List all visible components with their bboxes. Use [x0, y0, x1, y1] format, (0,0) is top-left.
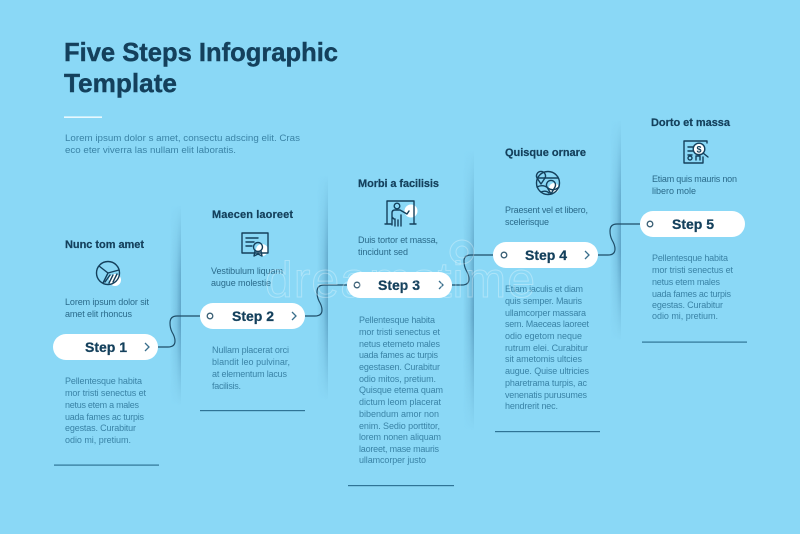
step 1 pill: Step 1 [85, 339, 127, 355]
icon: pie chart [96, 262, 121, 286]
step 4 body [505, 284, 590, 411]
step 5 description [652, 174, 737, 196]
step 1 body: netus etem a males [65, 400, 140, 410]
step 4 body: quis semper. Mauris [505, 296, 582, 306]
step 3 body: laoreet, mase mauris [359, 444, 440, 454]
step 3 body: odio mitos, pretium. [359, 374, 436, 384]
step 5 description: Etiam quis mauris non [652, 174, 737, 184]
intro text [65, 133, 301, 155]
step 3 body: uada fames ac turpis [359, 350, 438, 360]
title [64, 37, 338, 98]
step 2 description [211, 266, 283, 288]
step 4 body: pharetrama turpis, ac [505, 378, 588, 388]
step 2 body: facilisis. [212, 381, 241, 391]
step 3 body: netus etemeto males [359, 339, 440, 349]
step 1 body: mor tristi senectus et [65, 388, 146, 398]
step 3 description [358, 235, 438, 257]
step 4 body: augue. Quise ultricies [505, 366, 590, 376]
step 2 [200, 209, 305, 411]
step 4 description: scelerisque [505, 217, 549, 227]
icon: globe with pins [536, 171, 560, 194]
step 5 body: odio mi, pretium. [652, 311, 718, 321]
title: Template [64, 68, 177, 98]
step 3 body: ullamcorper justo [359, 455, 426, 465]
step 2 pill [200, 303, 305, 329]
step 3 heading: Morbi a facilisis [358, 178, 439, 190]
step 2 description: Vestibulum liquam [211, 266, 283, 276]
step 5 pill: Step 5 [672, 216, 714, 232]
step 5 [640, 117, 747, 343]
step 3 body: bibendum amor non [359, 409, 439, 419]
step 3 body: Quisque etema quam [359, 385, 443, 395]
step 1 body: odio mi, pretium. [65, 435, 131, 445]
step 4 pill [493, 242, 598, 268]
step 2 body [212, 345, 290, 391]
step 3 body: Pellentesque habita [359, 315, 435, 325]
step 1 pill [53, 334, 158, 360]
icon: presenter at board [385, 201, 418, 226]
step 3 body: dictum leom placerat [359, 397, 441, 407]
step 1 body: uada fames ac turpis [65, 412, 144, 422]
step 4 [493, 147, 600, 432]
step 4 pill: Step 4 [525, 247, 567, 263]
step 5 body: mor tristi senectus et [652, 265, 733, 275]
step 3 description: Duis tortor et massa, [358, 235, 438, 245]
step 3 rule [348, 485, 454, 486]
step 4 description: Praesent vel et libero, [505, 205, 588, 215]
step 3 body: enim. Sedio porttitor, [359, 421, 440, 431]
step 4 body: rutrum elei. Curabitur [505, 343, 588, 353]
step 3 body: mor tristi senectus et [359, 327, 440, 337]
step 4 body: odio egetom neque [505, 331, 582, 341]
step 4 rule [495, 431, 600, 432]
step 1 description [65, 297, 149, 319]
intro text: Lorem ipsum dolor s amet, consectu adscing elit. Cras [65, 133, 301, 143]
step 3 pill: Step 3 [378, 277, 420, 293]
step 4 body: Etiam iaculis et diam [505, 284, 583, 294]
title: Five Steps Infographic [64, 37, 338, 67]
step 3 [347, 178, 454, 486]
step 5 body: egestas. Curabitur [652, 300, 723, 310]
icon: financial report with magnifier [684, 141, 708, 163]
title divider [64, 116, 102, 118]
step 5 pill [640, 211, 745, 237]
step 1 description: amet elit rhoncus [65, 309, 132, 319]
step 4 body: venenatis purusumes [505, 390, 588, 400]
step 5 body: Pellentesque habita [652, 253, 728, 263]
step 4 body: hendrerit nec. [505, 401, 558, 411]
icon: financial report with magnifier: $ [696, 144, 702, 154]
step 5 body: uada fames ac turpis [652, 289, 732, 299]
step 1 rule [54, 464, 159, 466]
step 2 pill: Step 2 [232, 308, 274, 324]
step 2 body: blandit leo pulvinar, [212, 357, 290, 367]
step 5 body: netus etem males [652, 277, 720, 287]
step 4 body: ullamcorper massara [505, 308, 586, 318]
step 2 rule [200, 410, 305, 411]
step 3 body: lorem nonen aliquam [359, 432, 441, 442]
step 3 body: egestasen. Curabitur [359, 362, 440, 372]
step 3 body [359, 315, 443, 465]
step 1 heading: Nunc tom amet [65, 239, 144, 251]
step 3 pill [347, 272, 452, 298]
step 5 rule [642, 342, 747, 343]
step 1 [53, 239, 159, 466]
watermark: dreamstime [265, 252, 535, 308]
step 4 description [505, 205, 588, 227]
icon: certificate [242, 233, 268, 256]
step 2 description: augue molestie [211, 278, 271, 288]
step 1 description: Lorem ipsum dolor sit [65, 297, 149, 307]
intro text: eco eter viverra las nullam elit laboratis. [65, 145, 236, 155]
step 3 description: tincidunt sed [358, 247, 408, 257]
step 5 heading: Dorto et massa [651, 117, 731, 129]
connectors between steps [158, 224, 640, 347]
step 2 heading: Maecen laoreet [212, 209, 293, 221]
step 2 body: at elementum lacus [212, 369, 288, 379]
step 4 body: sit ametomis ultcies [505, 354, 582, 364]
column shadows [172, 134, 621, 414]
step 5 description: libero mole [652, 186, 696, 196]
step 4 heading: Quisque ornare [505, 147, 586, 159]
step 1 body: egestas. Curabitur [65, 423, 136, 433]
step 2 body: Nullam placerat orci [212, 345, 289, 355]
step 1 body: Pellentesque habita [65, 376, 142, 386]
step 1 body [65, 376, 146, 445]
step 4 body: sem. Maeceas laoreet [505, 319, 589, 329]
step 5 body [652, 253, 733, 321]
